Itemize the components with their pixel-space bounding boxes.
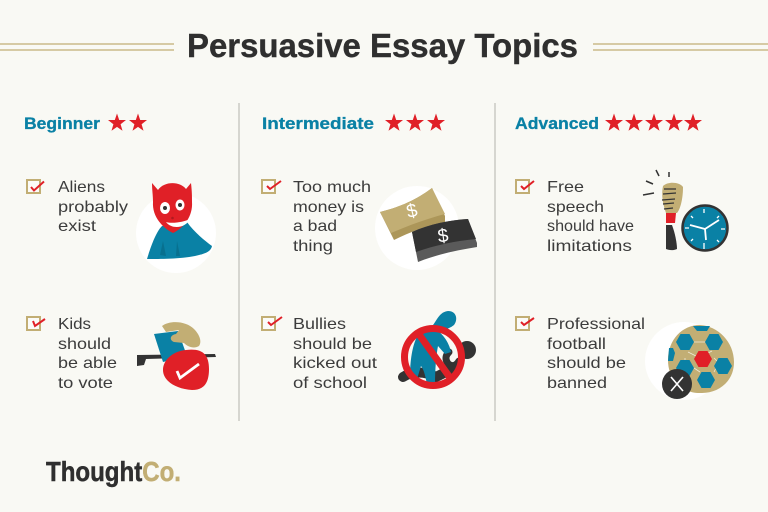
panel: intermediate — [262, 114, 477, 392]
text: kids: to vote — [58, 375, 113, 392]
text: kids: Kids — [58, 316, 91, 333]
stars: intermediate — [385, 114, 445, 131]
checkbox: aliens — [27, 180, 44, 193]
heading: intermediate: Intermediate — [262, 114, 374, 133]
icon: microphone and clock — [643, 170, 728, 250]
icon: devil — [136, 183, 216, 273]
text: bullies: of school — [293, 375, 367, 392]
text: football: should be — [547, 355, 626, 372]
text: football: banned — [547, 375, 607, 392]
text: money: Too much — [293, 179, 371, 196]
stars: advanced — [605, 114, 702, 131]
stars: beginner — [108, 114, 147, 131]
text: aliens: Aliens — [58, 179, 105, 196]
icon: money stacks: $ — [404, 200, 420, 223]
checkbox: kids — [27, 317, 45, 330]
checkbox: bullies — [262, 317, 282, 330]
heading: advanced: Advanced — [515, 114, 599, 133]
icon: banned football — [645, 322, 734, 400]
icon: ballot box — [137, 322, 216, 390]
text: kids: be able — [58, 355, 117, 372]
text: speech: Free — [547, 179, 584, 196]
logo: ThoughtCo. — [46, 456, 181, 487]
text: bullies: should be — [293, 336, 372, 353]
checkbox: football — [516, 317, 534, 330]
text: football: football — [547, 336, 606, 353]
icon: no bullying — [403, 311, 476, 386]
text: money: money is — [293, 199, 364, 216]
text: money: thing — [293, 238, 333, 255]
icon: money stacks — [375, 186, 477, 270]
panel: advanced — [515, 114, 734, 400]
icon: money stacks: $ — [436, 225, 450, 248]
text: speech: limitations — [547, 238, 632, 255]
text: bullies: kicked out — [293, 355, 378, 372]
text: kids: should — [58, 336, 111, 353]
text: aliens: probably — [58, 199, 128, 216]
title: Persuasive Essay Topics — [187, 27, 578, 64]
text: speech: should have — [547, 218, 634, 235]
checkbox: money — [262, 180, 281, 193]
panel: beginner — [24, 114, 216, 392]
text: aliens: exist — [58, 218, 97, 235]
text: speech: speech — [547, 199, 604, 216]
checkbox: speech — [516, 180, 534, 193]
text: money: a bad — [293, 218, 337, 235]
text: football: Professional — [547, 316, 645, 333]
text: bullies: Bullies — [293, 316, 346, 333]
heading: beginner: Beginner — [24, 114, 100, 133]
